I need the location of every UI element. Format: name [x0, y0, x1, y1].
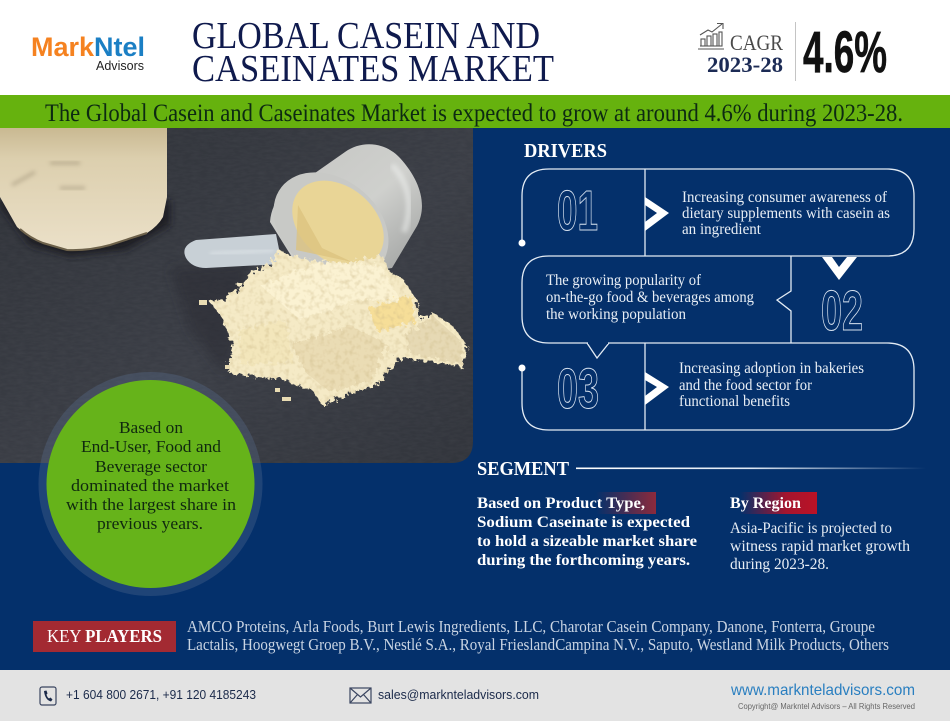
driver 03	[557, 357, 864, 421]
powder in scoop	[292, 180, 384, 264]
callout: end-user circle: Beverage sector	[95, 457, 207, 476]
footer: sales@marknteladvisors.com	[378, 688, 539, 702]
driver 02	[546, 272, 863, 343]
text block: by region	[730, 492, 910, 573]
flow outline	[522, 169, 914, 430]
white header background	[0, 0, 950, 95]
callout: end-user circle	[38, 372, 262, 596]
footer: Copyright@ Marknte​l Advisors – All Rights Reserved	[738, 701, 915, 711]
callout: end-user circle: End-User, Food and	[81, 437, 222, 456]
driver 03: and the food sector for	[679, 377, 813, 394]
text block: product type: to hold a sizeable market share	[477, 533, 697, 550]
jar	[0, 128, 167, 250]
title	[192, 15, 554, 90]
driver 01: dietary supplements with casein as	[682, 205, 890, 222]
speech tail	[587, 343, 609, 358]
driver 02: The growing popularity of	[546, 272, 702, 289]
callout: end-user circle: with the largest share in	[66, 495, 237, 514]
text block: by region: witness rapid market growth	[730, 538, 910, 555]
footer: +1 604 800 2671, +91 120 4185243	[66, 688, 256, 702]
arrow: chevron 1	[645, 197, 669, 231]
panel: drivers flow	[518, 169, 914, 430]
arrow: chevron 3	[645, 372, 669, 405]
callout: end-user circle: Based on	[119, 418, 184, 437]
arrow: chevron 2	[822, 257, 857, 280]
driver 01: Increasing consumer awareness of	[682, 189, 888, 206]
scoop rim	[274, 172, 388, 259]
text block: product type: Based on Product Type,	[477, 495, 645, 512]
icon: growth chart	[698, 24, 724, 49]
footer	[0, 670, 950, 721]
driver 03: functional benefits	[679, 393, 790, 410]
callout: end-user circle: previous years.	[97, 514, 203, 533]
driver 01: an ingredient	[682, 221, 762, 238]
powder pile	[211, 250, 467, 405]
logo: MarkNtel Advisors: Advisors	[96, 58, 144, 73]
text block: product type: during the forthcoming years.	[477, 552, 690, 569]
CAGR block: 4.6%	[803, 20, 887, 85]
key players: AMCO Proteins, Arla Foods, Burt Lewis Ingredients, LLC, Charotar Casein Company, Danone, Fonterra, Groupe	[187, 617, 875, 636]
title: CASEINATES MARKET	[192, 48, 554, 90]
text block: by region: during 2023-28.	[730, 556, 829, 573]
text block: product type: Sodium Caseinate is expected	[477, 514, 690, 531]
navy main panel	[0, 128, 950, 670]
jar shadow	[0, 200, 170, 256]
driver 01	[557, 179, 890, 243]
driver 02: on-the-go food & beverages among	[546, 289, 754, 306]
key players: KEY PLAYERS	[47, 626, 162, 646]
CAGR block: CAGR	[730, 30, 783, 55]
scoop handle	[184, 234, 282, 268]
driver 03: Increasing adoption in bakeries	[679, 360, 864, 377]
CAGR block	[698, 20, 887, 85]
pile shadow	[176, 266, 246, 364]
heading: segment: SEGMENT	[477, 458, 570, 480]
photo: casein powder and scoop	[0, 128, 473, 463]
icon: email	[350, 688, 371, 703]
scoop cup	[270, 144, 422, 272]
key players	[33, 617, 889, 654]
driver 01: 01	[557, 179, 598, 243]
driver 02: 02	[821, 279, 863, 343]
driver 02: the working population	[546, 306, 686, 323]
title: GLOBAL CASEIN AND	[192, 15, 540, 57]
text block: product type	[477, 492, 697, 569]
heading: drivers: DRIVERS	[524, 140, 607, 162]
CAGR block: 2023-28	[707, 52, 783, 77]
text block: by region: By Region	[730, 495, 801, 512]
text block: by region: Asia-Pacific is projected to	[730, 520, 892, 537]
footer: www.marknteladvisors.com	[730, 682, 915, 699]
logo: MarkNtel Advisors: MarkNtel	[31, 32, 145, 62]
callout: end-user circle: dominated the market	[71, 476, 229, 495]
driver 03: 03	[557, 357, 599, 421]
icon: phone	[40, 687, 56, 705]
